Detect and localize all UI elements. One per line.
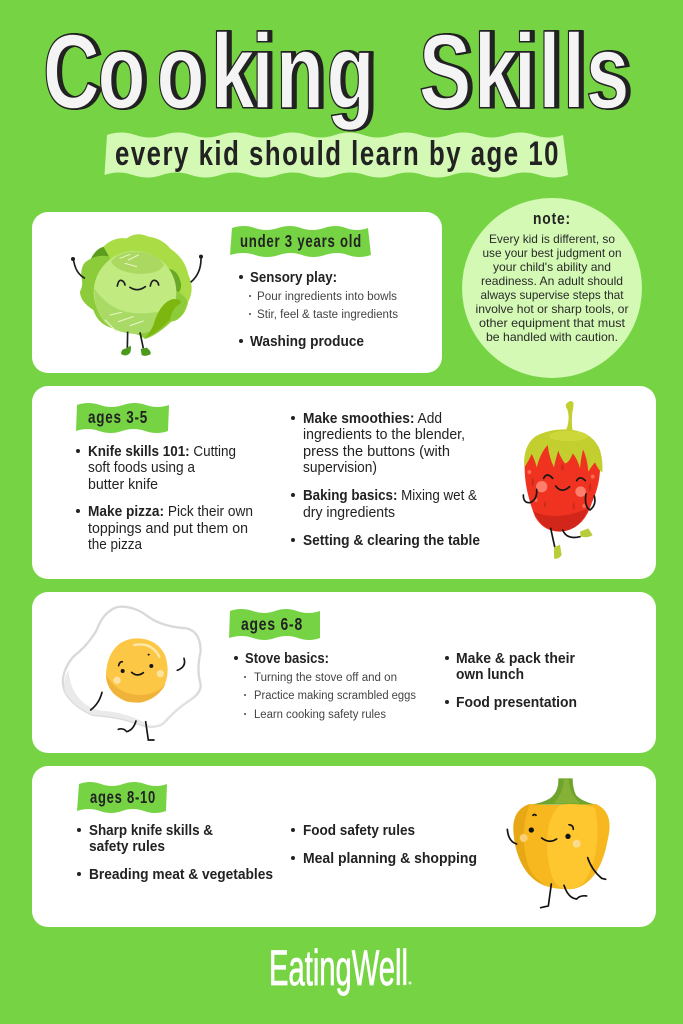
age tag: ages 8-10: ages 8-10 [90,787,156,807]
list: safety and planning: Meal planning & shopping [303,851,477,867]
list: sensory play: Sensory play: [250,270,337,286]
note callout: other equipment that must [479,316,626,330]
list: smoothies, baking, table [291,411,480,549]
list: knife skills and pizza: soft foods using a [88,460,196,476]
list: knife skills and breading: Breading meat & vegetables [89,867,273,883]
list: knife skills and breading [77,823,273,883]
list: lunch and presentation: Make & pack their [456,651,575,667]
list: stove basics: Turning the stove off and on [254,672,397,684]
icon: cabbage character [71,234,203,356]
panel: under 3 years old [32,212,442,373]
list: smoothies, baking, table: dry ingredients [303,505,395,521]
note callout: readiness. An adult should [481,274,623,288]
list: smoothies, baking, table: press the buttons (with [303,444,450,460]
icon: yellow pepper character [507,778,610,908]
list: safety and planning [291,823,477,867]
note callout: your child's ability and [493,260,611,274]
list: lunch and presentation: Food presentation [456,695,577,711]
list: sensory play: Pour ingredients into bowls [257,291,397,303]
age tag: ages 6-8: ages 6-8 [241,614,303,634]
icon: fried egg character [63,607,201,740]
list: smoothies, baking, table: supervision) [303,460,377,476]
list: knife skills and pizza: butter knife [88,477,158,493]
icon: strawberry character [523,401,603,559]
list: stove basics [234,651,416,721]
age tag: ages 3-5 [76,403,169,433]
list: knife skills and breading: Sharp knife skills & [89,823,213,839]
list: sensory play: Washing produce [250,334,364,350]
title: Cooking Skills [43,13,629,131]
list: knife skills and pizza [76,444,253,553]
list: knife skills and pizza: Knife skills 101: Cutting [88,444,236,460]
age tag: under 3 years old: under 3 years old [240,231,362,251]
list: smoothies, baking, table: ingredients to the blender, [303,427,465,443]
list: smoothies, baking, table: Baking basics: Mixing wet & [303,488,477,504]
list: sensory play: Stir, feel & taste ingredients [257,309,398,321]
panel: ages 8-10 [32,766,656,927]
list: safety and planning: Food safety rules [303,823,415,839]
list: knife skills and pizza: Make pizza: Pick their own [88,504,253,520]
subtitle banner [104,132,568,178]
list: stove basics: Practice making scrambled eggs [254,690,416,702]
list: knife skills and pizza: toppings and put them on [88,521,248,537]
logo: EatingWell [269,940,412,996]
panel: ages 6-8 [32,592,656,753]
logo: EatingWell: EatingWell [269,940,408,996]
note callout: Every kid is different, so [489,232,615,246]
note callout: use your best judgment on [482,246,622,260]
list: lunch and presentation: own lunch [456,667,524,683]
age tag: under 3 years old [230,226,371,257]
list: stove basics: Learn cooking safety rules [254,709,386,721]
age tag: ages 6-8 [229,609,320,640]
age tag: ages 8-10 [77,782,167,813]
note callout: be handled with caution. [486,330,618,344]
list: knife skills and breading: safety rules [89,839,165,855]
list: sensory play [239,270,398,350]
note callout [462,198,642,378]
panel: ages 3-5 [32,386,656,579]
list: smoothies, baking, table: Make smoothies: Add [303,411,442,427]
list: smoothies, baking, table: Setting & clearing the table [303,533,480,549]
list: knife skills and pizza: the pizza [88,537,143,553]
age tag: ages 3-5: ages 3-5 [88,407,148,427]
note callout: note: [533,210,571,228]
list: lunch and presentation [445,651,577,711]
note callout: involve hot or sharp tools, or [476,302,628,316]
note callout: always supervise steps that [480,288,624,302]
list: stove basics: Stove basics: [245,651,329,667]
